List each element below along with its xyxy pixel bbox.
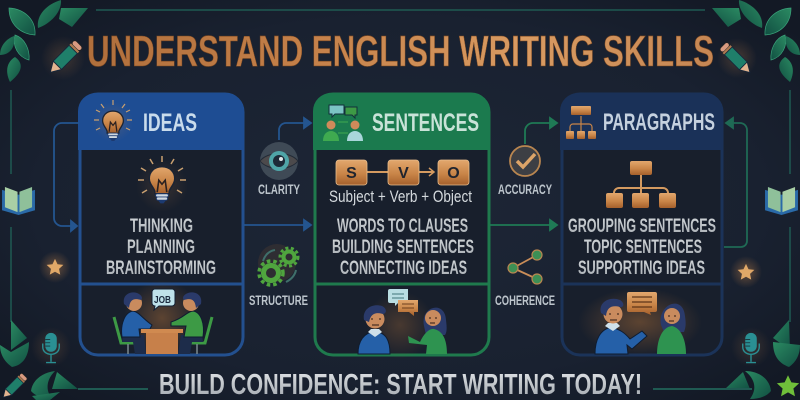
paragraphs list: SUPPORTING IDEAS	[578, 257, 705, 279]
corner leaves: top right	[712, 0, 800, 82]
icon: check badge, accuracy	[510, 146, 540, 176]
label: structure: STRUCTURE	[249, 293, 308, 308]
label: coherence: COHERENCE	[495, 293, 555, 308]
icon: ideas header bulb	[93, 100, 133, 142]
formula caption: Subject + Verb + Object	[329, 187, 472, 206]
corner leaves: top left	[0, 0, 88, 82]
illustration: interview at table: JOB	[154, 295, 171, 306]
arrow: feedback into paragraphs	[724, 118, 747, 247]
sentences list: CONNECTING IDEAS	[340, 257, 467, 279]
paragraphs divider	[562, 282, 722, 286]
sentences list	[332, 215, 474, 279]
bottom right rule	[653, 388, 752, 390]
icon: microphone left	[31, 327, 71, 367]
subject verb object diagram	[336, 160, 469, 185]
illustration: interview at table	[114, 280, 212, 356]
ideas list	[106, 215, 216, 279]
label: clarity: CLARITY	[258, 182, 300, 197]
ideas header	[78, 93, 244, 150]
panel: ideas	[78, 93, 244, 356]
right side rail	[789, 90, 791, 322]
icon: open book left	[2, 187, 35, 215]
ideas list: BRAINSTORMING	[106, 257, 216, 279]
icon: green star	[777, 375, 799, 396]
icon: share nodes, coherence	[508, 250, 542, 284]
paragraphs list: GROUPING SENTENCES	[568, 215, 716, 237]
label: accuracy: ACCURACY	[498, 182, 552, 197]
ideas heading: IDEAS	[143, 109, 197, 137]
icon: gears, structure	[258, 244, 298, 285]
paragraphs list	[568, 215, 716, 279]
panel: paragraphs	[560, 93, 723, 356]
icon: ideas large bulb	[136, 156, 188, 212]
illustration: two people discussing	[578, 288, 702, 356]
left side rail	[10, 90, 12, 322]
subject verb object diagram: S	[346, 165, 357, 182]
paragraphs heading: PARAGRAPHS	[603, 109, 715, 136]
subject verb object diagram: V	[398, 165, 409, 182]
panel: sentences	[313, 93, 490, 359]
icon: open book right	[765, 187, 798, 215]
arrow: accuracy to paragraphs	[525, 118, 557, 144]
arrow: clarity to sentences	[279, 118, 311, 140]
icon: hierarchy small	[566, 106, 596, 139]
icon: microphone right	[731, 327, 771, 367]
top decorative rule	[96, 9, 705, 11]
ideas list: PLANNING	[127, 236, 195, 258]
sentences heading: SENTENCES	[372, 109, 479, 137]
sentences list: WORDS TO CLAUSES	[337, 215, 468, 237]
arrow: feedback into ideas	[54, 123, 79, 231]
arrow: ideas to sentences	[244, 220, 311, 230]
bottom right leaves	[725, 320, 800, 399]
bottom left rule	[78, 388, 148, 390]
icon: hierarchy large	[606, 161, 676, 208]
icon: eye, clarity	[260, 142, 298, 180]
icon: star right	[730, 256, 762, 288]
arrow: sentences to paragraphs	[490, 220, 557, 230]
paragraphs header	[560, 93, 723, 150]
icon: star left	[39, 251, 71, 283]
icon: pencil bottom left	[0, 373, 28, 400]
subject verb object diagram: O	[447, 165, 460, 182]
ideas list: THINKING	[130, 215, 193, 237]
icon: people talking	[323, 105, 363, 141]
sentences header	[313, 93, 490, 150]
paragraphs list: TOPIC SENTENCES	[584, 236, 702, 258]
illustration: man and woman talking	[358, 289, 447, 359]
sentences list: BUILDING SENTENCES	[332, 236, 474, 258]
icon: pencil top left	[41, 36, 85, 80]
sentences divider	[315, 282, 489, 286]
icon: pencil top right	[717, 38, 757, 78]
ideas divider	[80, 282, 243, 286]
bottom left leaves	[0, 320, 78, 400]
